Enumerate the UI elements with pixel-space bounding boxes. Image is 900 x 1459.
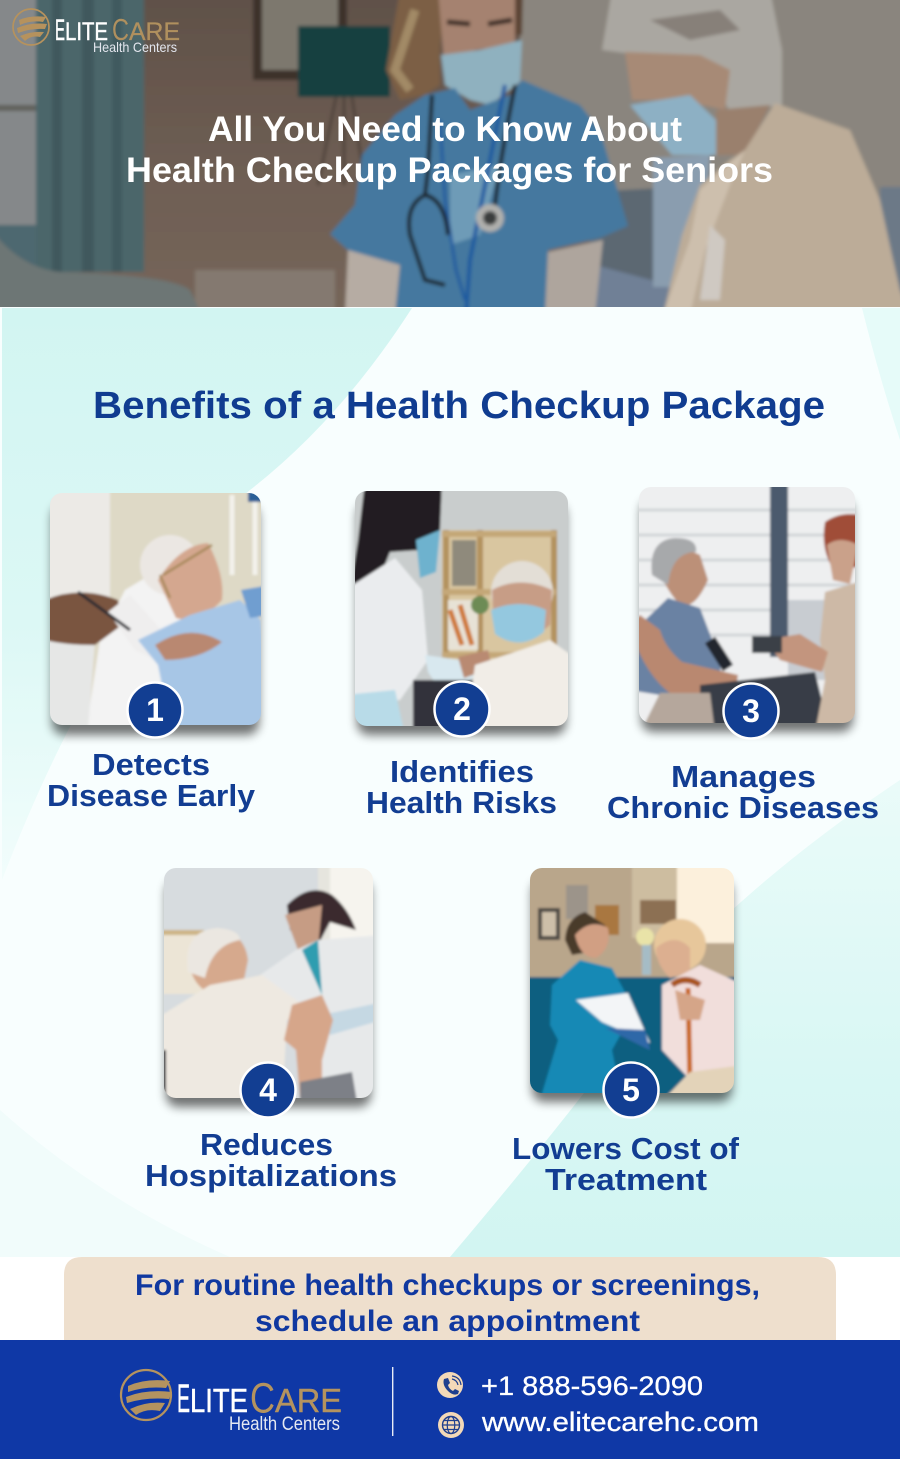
phone number: +1 888-596-2090 — [481, 1371, 703, 1401]
footer logo: ARE — [275, 1382, 342, 1419]
label 2 — [366, 754, 557, 820]
section heading: Benefits of a Health Checkup Package — [93, 385, 825, 427]
photo: nurse measuring blood pressure — [639, 487, 855, 723]
benefit card 1: detects disease early — [40, 483, 271, 813]
footer divider — [392, 1367, 393, 1436]
label 5 — [512, 1131, 740, 1197]
icon: globe — [438, 1412, 464, 1438]
benefit card 4: reduces hospitalizations — [145, 858, 397, 1193]
footer logo: E — [177, 1377, 190, 1421]
header logo: Health Centers — [93, 39, 177, 55]
call to action banner: schedule an appointment — [255, 1305, 640, 1338]
number badge 4: 4 — [259, 1072, 277, 1108]
benefit card 2: identifies health risks — [345, 481, 578, 820]
footer bar — [0, 1340, 900, 1459]
number badge 1: 1 — [146, 692, 164, 728]
website: www.elitecarehc.com — [481, 1407, 759, 1437]
benefit card 5: lowers cost of treatment — [512, 858, 744, 1197]
call to action banner — [64, 1257, 836, 1340]
photo: doctor with masked senior — [355, 491, 568, 726]
footer logo: C — [250, 1374, 275, 1422]
footer logo: Health Centers — [229, 1414, 340, 1435]
footer logo: LITE — [190, 1382, 248, 1419]
number badge 2: 2 — [453, 691, 471, 727]
header photo: nurse and senior patient — [0, 0, 900, 320]
icon: phone — [437, 1372, 463, 1398]
label 2: Health Risks — [366, 785, 557, 820]
number badge 5: 5 — [622, 1072, 640, 1108]
label 3: Chronic Diseases — [607, 790, 879, 825]
number badge 5 — [604, 1062, 658, 1118]
number badge 1 — [128, 682, 182, 738]
main title: Health Checkup Packages for Seniors — [126, 151, 773, 190]
footer logo — [121, 1370, 342, 1435]
main title: All You Need to Know About — [208, 110, 682, 149]
number badge 3: 3 — [742, 693, 760, 729]
label 1: Detects — [92, 747, 210, 782]
white strip below panel — [0, 1257, 900, 1340]
label 2: Identifies — [390, 754, 534, 789]
photo: doctor examining senior in bed — [50, 493, 261, 725]
panel: benefits background — [0, 307, 900, 1257]
label 3 — [607, 759, 879, 825]
label 5: Treatment — [545, 1162, 707, 1197]
number badge 3 — [724, 684, 778, 738]
label 4: Reduces — [200, 1127, 333, 1162]
label 1 — [47, 747, 256, 813]
number badge 2 — [434, 682, 490, 736]
label 3: Manages — [671, 759, 816, 794]
main title — [126, 110, 773, 190]
label 4: Hospitalizations — [145, 1158, 397, 1193]
header logo: E — [55, 14, 65, 47]
photo: nurse and senior woman on sofa — [530, 868, 734, 1093]
call to action banner: For routine health checkups or screenings, — [135, 1269, 760, 1302]
header logo: ARE — [129, 18, 180, 46]
label 4 — [145, 1127, 397, 1193]
photo: nurse helping senior man — [164, 868, 373, 1098]
label 1: Disease Early — [47, 778, 256, 813]
benefit card 3: manages chronic diseases — [607, 477, 879, 825]
number badge 4 — [240, 1062, 296, 1118]
label 5: Lowers Cost of — [512, 1131, 740, 1166]
header logo: LITE — [65, 18, 108, 46]
header logo: C — [112, 12, 129, 47]
header logo — [13, 9, 180, 55]
